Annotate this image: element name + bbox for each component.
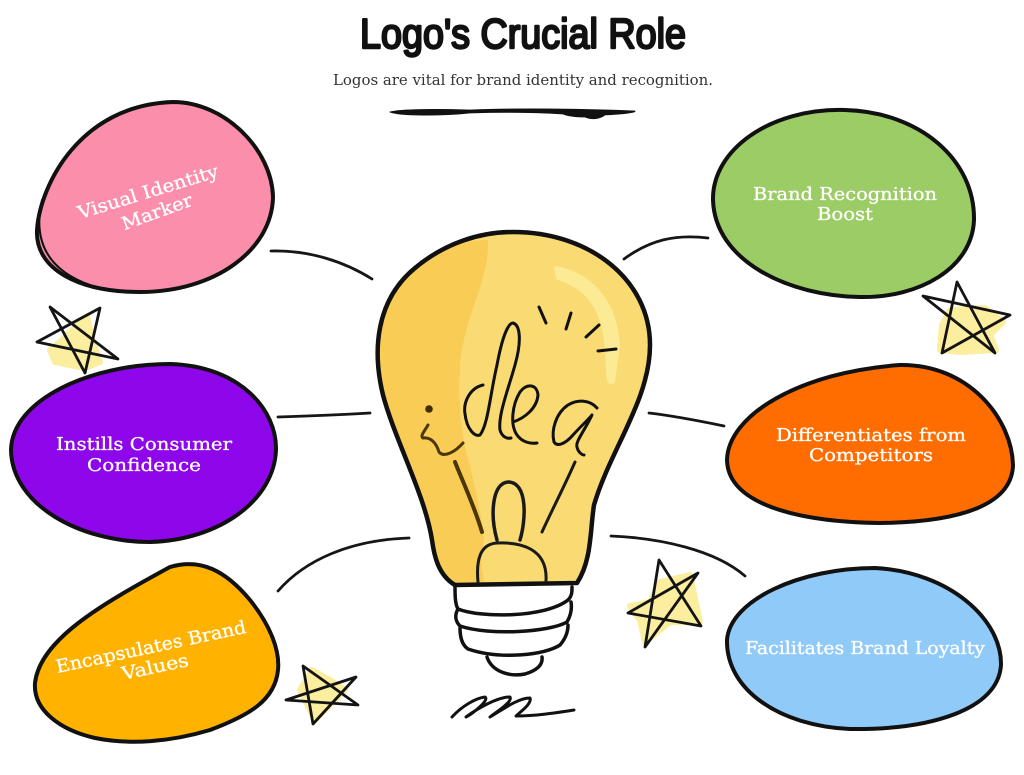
panel: Visual Identity Marker xyxy=(37,102,273,292)
panel: Facilitates Brand Loyalty: Facilitates Brand Loyalty xyxy=(745,638,986,659)
panel: Instills Consumer Confidence xyxy=(11,364,276,542)
panel: Visual Identity Marker: Visual Identity xyxy=(74,161,222,224)
panel: Encapsulates Brand Values xyxy=(35,564,278,742)
icon: idea light bulb xyxy=(378,232,650,717)
bulb left shade xyxy=(378,240,488,585)
bulb glass xyxy=(378,232,650,585)
panel: Facilitates Brand Loyalty xyxy=(727,568,1001,729)
icon: star top left xyxy=(37,307,118,373)
title underline stroke xyxy=(390,109,635,119)
connector: Instills Confidence to bulb xyxy=(278,413,370,417)
icon: star bottom left xyxy=(286,666,358,724)
panel: Instills Consumer Confidence: Confidence xyxy=(87,455,201,476)
title: Logo's Crucial Role xyxy=(360,10,686,57)
bulb outline xyxy=(378,232,650,585)
connector: Encapsulates to bulb xyxy=(278,538,409,591)
connector: Brand Recognition to bulb xyxy=(624,237,708,259)
bulb highlight xyxy=(556,268,618,382)
panel: Instills Consumer Confidence: Instills Consumer xyxy=(56,434,232,455)
icon: star bottom centre-right xyxy=(628,560,701,647)
panel: Differentiates from Competitors: Competitors xyxy=(809,445,933,466)
filament xyxy=(455,462,575,582)
light rays xyxy=(539,307,616,351)
screw base xyxy=(455,585,572,675)
connector: Visual Identity to bulb xyxy=(271,251,372,279)
panel: Encapsulates Brand Values: Values xyxy=(119,650,191,685)
connector: Differentiates to bulb xyxy=(649,413,724,426)
panel: Brand Recognition Boost: Brand Recognition xyxy=(753,184,937,205)
panel: Differentiates from Competitors xyxy=(727,365,1013,523)
icon: star top right xyxy=(923,282,1010,353)
squiggle under bulb xyxy=(452,697,574,717)
connector: Loyalty to bulb xyxy=(611,536,745,576)
panel: Encapsulates Brand Values: Encapsulates Brand xyxy=(54,617,248,678)
panel: Brand Recognition Boost: Boost xyxy=(817,204,874,225)
idea word xyxy=(422,323,597,455)
subtitle: Logos are vital for brand identity and recognition. xyxy=(333,73,713,89)
panel: Brand Recognition Boost xyxy=(713,110,974,297)
panel: Differentiates from Competitors: Differentiates from xyxy=(776,425,966,446)
panel: Visual Identity Marker: Marker xyxy=(119,190,196,235)
